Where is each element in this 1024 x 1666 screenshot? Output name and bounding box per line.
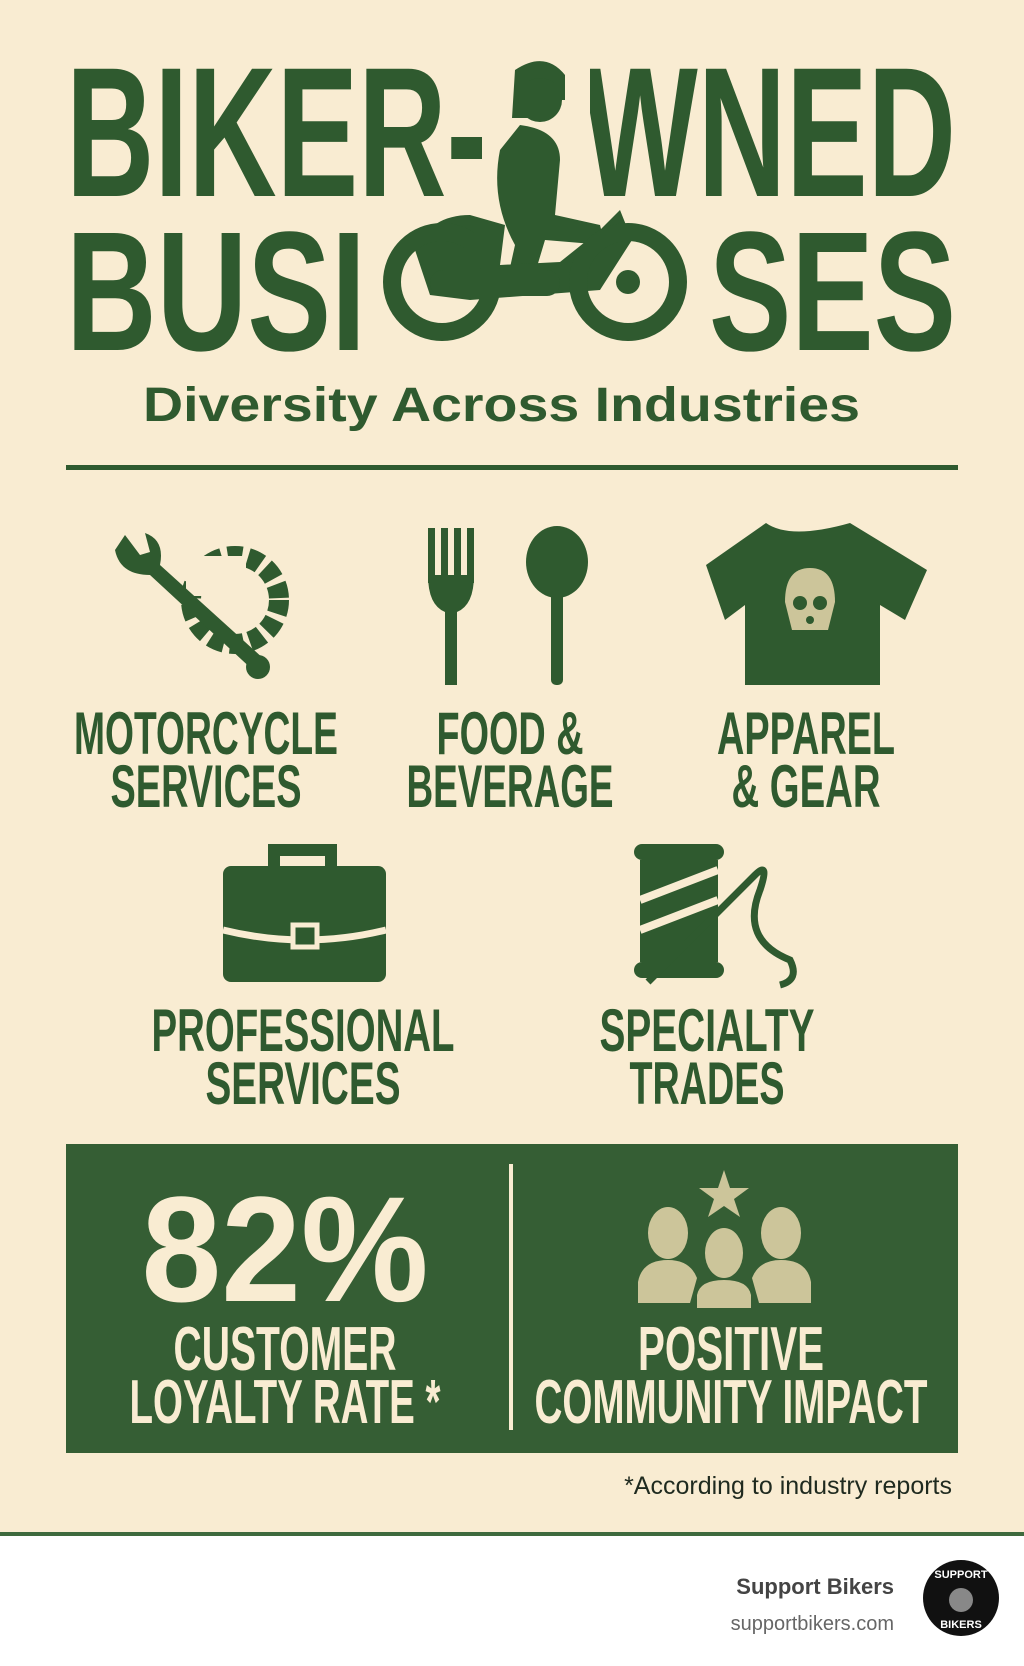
icon: briefcase [223, 844, 386, 982]
label: motorcycle services: SERVICES [110, 753, 302, 820]
footer brand: Support Bikers [736, 1574, 894, 1599]
panel: stats [66, 1144, 958, 1453]
label: food & beverage: FOOD & [436, 700, 584, 767]
label: apparel & gear: APPAREL [717, 700, 895, 767]
icon: t-shirt with skull [706, 523, 927, 685]
label: motorcycle services: MOTORCYCLE [74, 700, 338, 767]
label: food & beverage: BEVERAGE [406, 753, 614, 820]
logo [923, 1560, 999, 1636]
stat: 82% [130, 1165, 441, 1437]
logo: BIKERS [940, 1619, 982, 1631]
stat: community impact [534, 1315, 928, 1437]
icon: fork and spoon [428, 526, 588, 685]
icon: community people with star [638, 1170, 811, 1308]
label: apparel & gear [717, 700, 895, 820]
footer brand [731, 1574, 894, 1635]
title [66, 30, 956, 387]
footer brand: supportbikers.com [731, 1613, 894, 1635]
label: food & beverage [406, 700, 614, 820]
footnote: *According to industry reports [624, 1472, 952, 1500]
label: specialty trades: TRADES [630, 1050, 784, 1117]
icon: wrench and gear [115, 533, 279, 679]
label: specialty trades [600, 997, 814, 1117]
label: professional services: SERVICES [206, 1050, 400, 1117]
icon: motorcycle rider [372, 40, 709, 355]
label: professional services: PROFESSIONAL [152, 997, 454, 1064]
label: motorcycle services [74, 700, 338, 820]
logo: SUPPORT [934, 1569, 988, 1581]
stat: community impact: POSITIVE [638, 1315, 824, 1384]
label: specialty trades: SPECIALTY [600, 997, 814, 1064]
stat: 82%: CUSTOMER [174, 1315, 396, 1384]
stat: 82%: LOYALTY RATE * [130, 1368, 441, 1437]
icon: spool and needle [634, 844, 793, 985]
stat: 82%: 82% [142, 1165, 428, 1333]
label: professional services [152, 997, 454, 1117]
subtitle: Diversity Across Industries [143, 379, 860, 432]
title: BUSI [66, 197, 366, 387]
label: apparel & gear: & GEAR [732, 753, 880, 820]
